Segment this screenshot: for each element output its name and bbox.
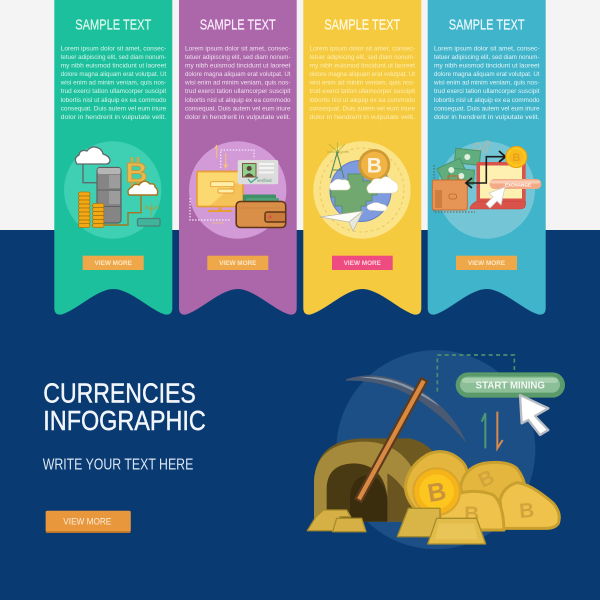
ribbon shape: [54, 0, 172, 315]
title: CURRENCIES: [43, 377, 196, 408]
text block: lobortis nisl ut aliquip ex ea commodo: [61, 97, 166, 104]
text block: trud exerci tation ullamcorper suscipit: [185, 88, 291, 95]
button: VIEW MORE: [468, 260, 506, 267]
gold bars: [307, 508, 486, 544]
text block: dolor in hendrerit in vulputate velit.: [434, 114, 540, 121]
title: INFOGRAPHIC: [43, 405, 206, 436]
text block: Lorem ipsum dolor sit amet, consec-: [310, 45, 415, 52]
icon: globe, coin and paper plane: [313, 141, 411, 239]
text block: Lorem ipsum dolor sit amet, consec-: [434, 45, 540, 52]
ribbon shape: [179, 0, 297, 315]
button: [332, 256, 393, 270]
icon: monitor, id card and wallet: [189, 141, 286, 239]
faint bitcoin symbols: B: [475, 466, 498, 493]
dashed connector: [437, 355, 514, 392]
button: [456, 256, 517, 270]
start mining button: START MINING: [476, 380, 545, 391]
text block: wisi enim ad minim veniam, quis nos-: [184, 80, 290, 87]
button: VIEW MORE: [344, 260, 382, 267]
icon: server and clouds: [64, 141, 161, 239]
icon: exchange laptop and briefcase: EXCHANGE: [505, 182, 531, 187]
text block: consequat. Duis autem vel eum iriure: [61, 105, 166, 112]
text block: trud exerci tation ullamcorper suscipit: [310, 88, 415, 95]
text block: dolore magna aliquam erat volutpat. Ut: [61, 71, 166, 78]
panel: yellow ribbon: [303, 0, 421, 315]
text block: dolor in hendrerit in vulputate velit.: [61, 114, 166, 121]
button: VIEW MORE: [95, 260, 133, 267]
text block: trud exerci tation ullamcorper suscipit: [434, 88, 540, 95]
text block: wisi enim ad minim veniam, quis nos-: [433, 80, 540, 87]
text block: my nibh euismod tincidunt ut laoreet: [434, 62, 540, 69]
subtitle: WRITE YOUR TEXT HERE: [43, 456, 193, 473]
text block: Lorem ipsum dolor sit amet, consec-: [61, 45, 166, 52]
text block: tetuer adipiscing elit, sed diam nonum-: [434, 54, 540, 61]
heading: SAMPLE TEXT: [449, 16, 525, 33]
text block: dolore magna aliquam erat volutpat. Ut: [185, 71, 291, 78]
heading: SAMPLE TEXT: [200, 16, 276, 33]
button: [207, 256, 268, 270]
text block: tetuer adipiscing elit, sed diam nonum-: [185, 54, 290, 61]
text block: wisi enim ad minim veniam, quis nos-: [309, 80, 415, 87]
faint bitcoin symbols: [464, 466, 535, 526]
arrows up and down: [482, 412, 503, 448]
text block: lobortis nisl ut aliquip ex ea commodo: [185, 97, 291, 104]
pickaxe: [346, 375, 467, 497]
text block: my nibh euismod tincidunt ut laoreet: [310, 62, 415, 69]
start mining button: [456, 372, 565, 398]
heading: SAMPLE TEXT: [75, 16, 151, 33]
text block: [309, 45, 415, 121]
text block: consequat. Duis autem vel eum iriure: [434, 105, 540, 112]
text block: dolor in hendrerit in vulputate velit.: [310, 114, 415, 121]
icon: monitor, id card and wallet: money: [212, 220, 224, 225]
text block: my nibh euismod tincidunt ut laoreet: [61, 62, 166, 69]
text block: dolor in hendrerit in vulputate velit.: [185, 114, 291, 121]
text block: [184, 45, 291, 121]
text block: [433, 45, 540, 121]
panel: blue ribbon: [428, 0, 546, 315]
text block: trud exerci tation ullamcorper suscipit: [61, 88, 166, 95]
faint bitcoin symbols: B: [518, 499, 535, 523]
ribbon shape: [303, 0, 421, 315]
backdrop circle: [336, 350, 535, 549]
icon: monitor, id card and wallet: verified: [257, 178, 272, 183]
text block: [60, 45, 166, 121]
icon: globe, coin and paper plane: B: [367, 154, 382, 178]
text block: tetuer adipiscing elit, sed diam nonum-: [310, 54, 415, 61]
illustration: bitcoin mining: [307, 350, 565, 549]
ribbon shape: [428, 0, 546, 315]
main button: [46, 511, 131, 533]
icon: exchange laptop and briefcase: [432, 141, 541, 239]
faint bitcoin symbols: B: [464, 503, 479, 526]
icon: server and clouds: B: [126, 157, 148, 188]
heading: SAMPLE TEXT: [324, 16, 400, 33]
main button: VIEW MORE: [63, 516, 111, 526]
mine entrance: [314, 438, 440, 522]
panel: purple ribbon: [179, 0, 297, 315]
bitcoin coin: B: [425, 477, 448, 508]
bitcoin coin: [413, 468, 460, 515]
gold nuggets: [405, 452, 559, 530]
text block: consequat. Duis autem vel eum iriure: [185, 105, 291, 112]
text block: my nibh euismod tincidunt ut laoreet: [185, 62, 291, 69]
text block: tetuer adipiscing elit, sed diam nonum-: [61, 54, 166, 61]
text block: lobortis nisl ut aliquip ex ea commodo: [434, 97, 540, 104]
text block: wisi enim ad minim veniam, quis nos-: [60, 80, 166, 87]
title: [43, 377, 206, 436]
button: [83, 256, 144, 270]
icon: exchange laptop and briefcase: B: [512, 152, 520, 164]
text block: Lorem ipsum dolor sit amet, consec-: [185, 45, 290, 52]
text block: consequat. Duis autem vel eum iriure: [310, 105, 415, 112]
button: VIEW MORE: [219, 260, 257, 267]
panel: green ribbon: [54, 0, 172, 315]
cursor: [520, 395, 548, 435]
text block: dolore magna aliquam erat volutpat. Ut: [310, 71, 415, 78]
text block: dolore magna aliquam erat volutpat. Ut: [434, 71, 540, 78]
text block: lobortis nisl ut aliquip ex ea commodo: [310, 97, 415, 104]
